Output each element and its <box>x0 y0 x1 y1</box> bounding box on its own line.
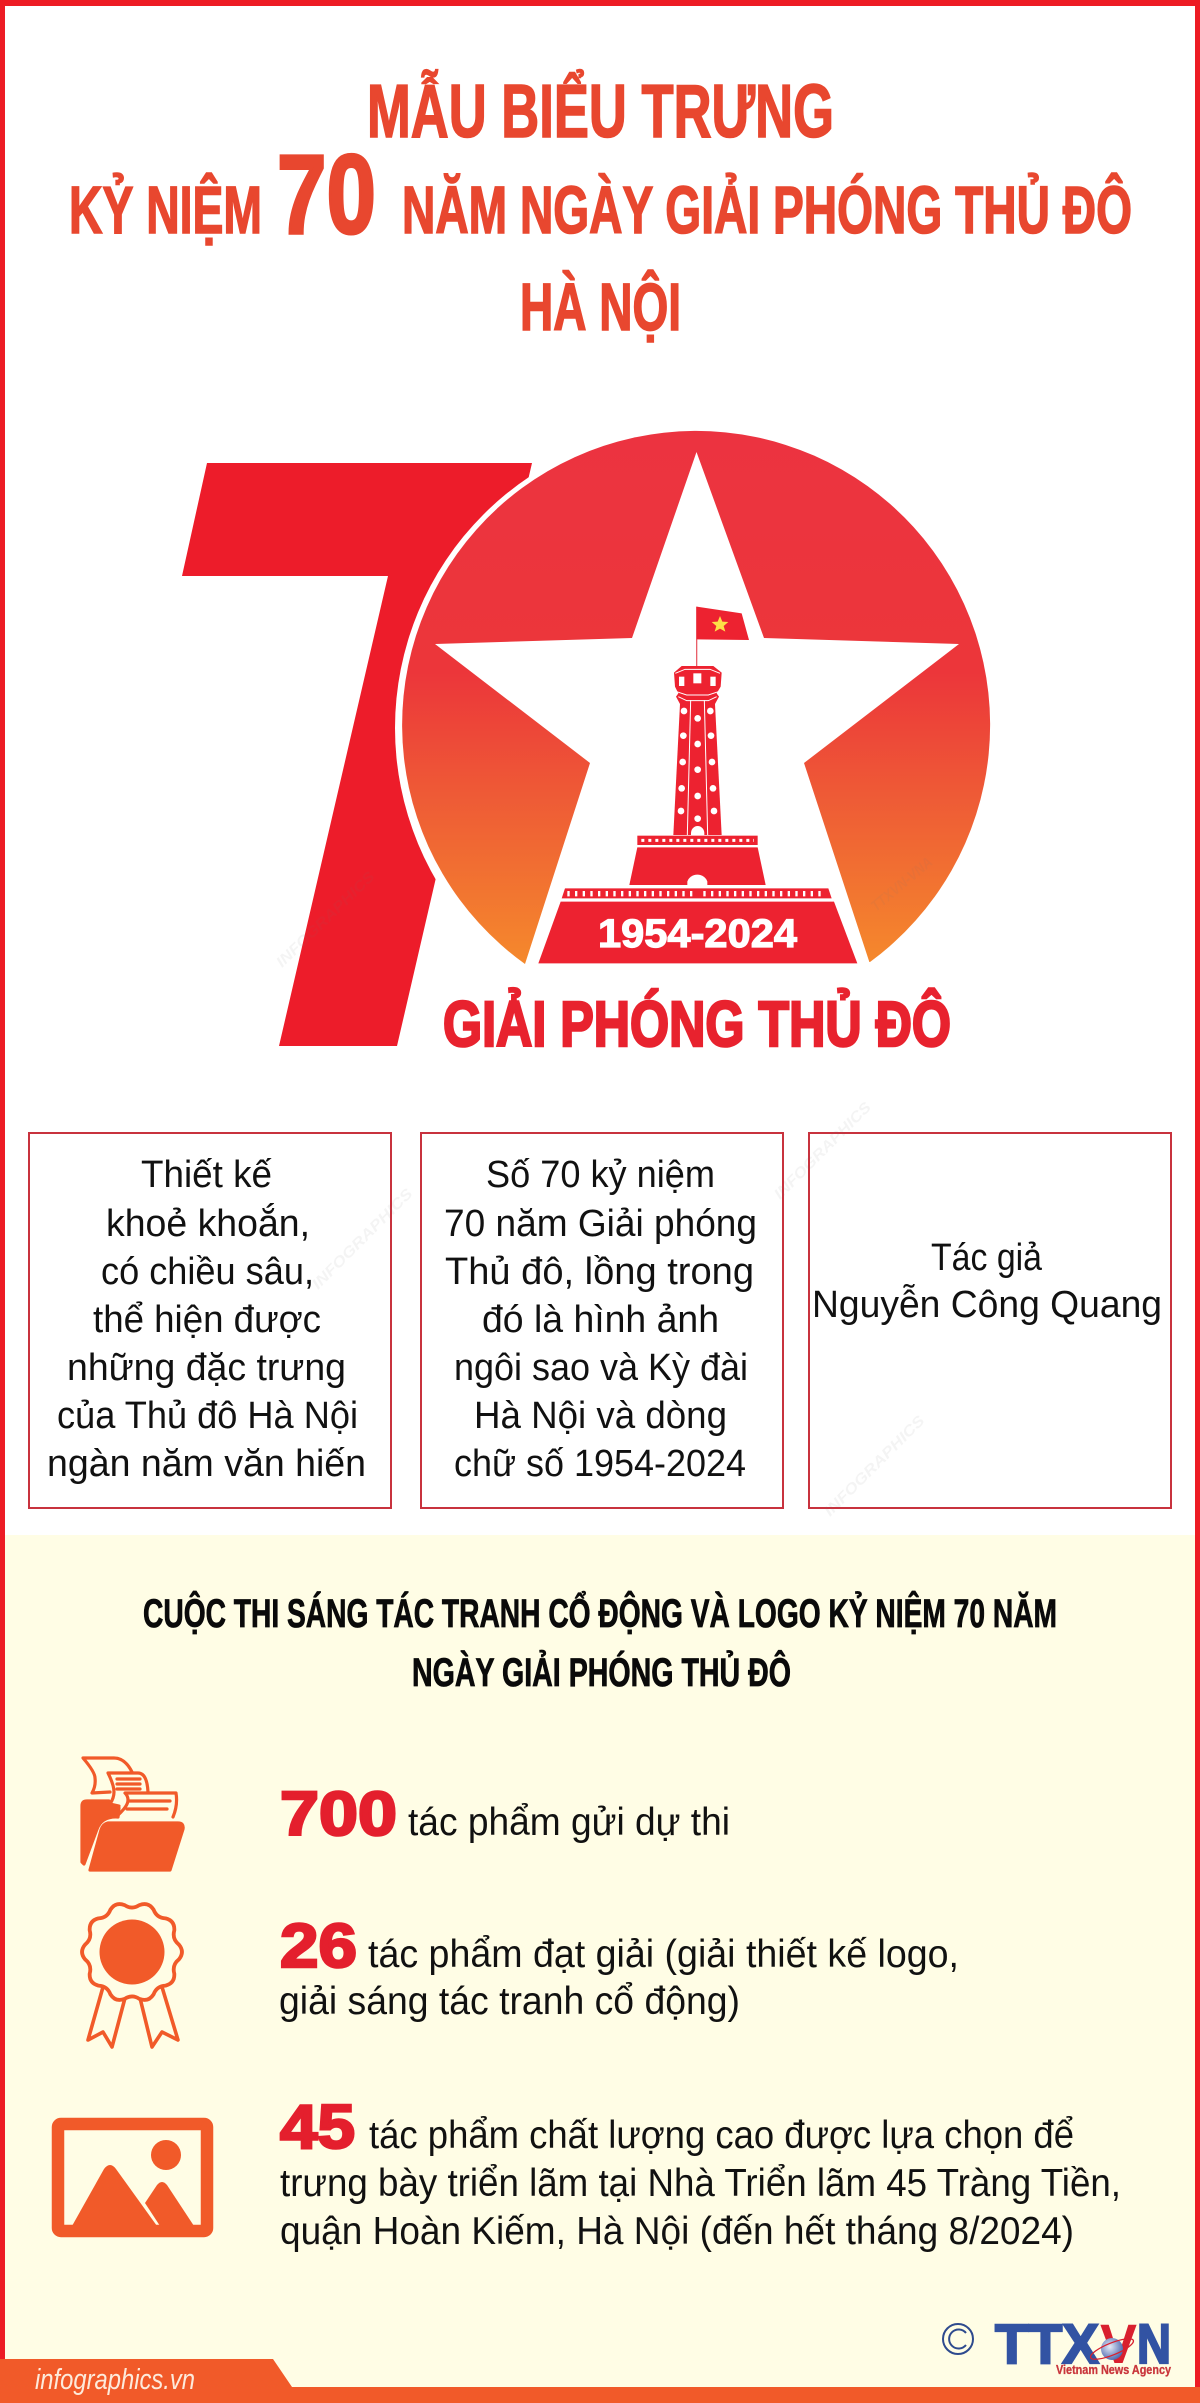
panel: design description: thể hiện được <box>93 1299 321 1341</box>
faint agency watermarks: INFOGRAPHICS <box>309 1185 416 1293</box>
panel: meaning of the number 70: Hà Nội và dòng <box>474 1395 727 1437</box>
gradient circle <box>402 431 990 964</box>
panel: author: Nguyễn Công Quang <box>812 1283 1162 1326</box>
panel: meaning of the number 70: Số 70 kỷ niệm <box>486 1154 715 1196</box>
title: 70 <box>277 132 376 257</box>
logo: TTXVN: V <box>1100 2312 1137 2375</box>
faint agency watermarks <box>273 854 936 1520</box>
panel: meaning of the number 70: 70 năm Giải phóng <box>444 1203 757 1245</box>
cream background panel <box>5 1535 1195 2387</box>
stat: 26 awarded works: tác phẩm đạt giải (giải thiết kế logo, <box>368 1933 959 1976</box>
panel: meaning of the number 70: ngôi sao và Kỳ đài <box>454 1347 748 1389</box>
panel: design description: của Thủ đô Hà Nội <box>57 1395 358 1437</box>
icon: award rosette <box>82 1904 182 2047</box>
panel: meaning of the number 70: chữ số 1954-2024 <box>454 1443 746 1485</box>
panel: meaning of the number 70: đó là hình ảnh <box>482 1299 719 1341</box>
stat: 700 works: tác phẩm gửi dự thi <box>408 1801 730 1844</box>
stat: 45 exhibited works: tác phẩm chất lượng cao được lựa chọn để <box>369 2114 1074 2157</box>
logo wordmark: GIẢI PHÓNG THỦ ĐÔ <box>443 987 951 1060</box>
panel: author <box>809 1133 1171 1508</box>
stat: 700 works <box>280 1780 730 1849</box>
stat: 45 exhibited works: trưng bày triển lãm tại Nhà Triển lãm 45 Tràng Tiền, <box>280 2162 1121 2205</box>
title: HÀ NỘI <box>520 270 681 345</box>
panel: design description: ngàn năm văn hiến <box>47 1443 366 1485</box>
panel: design description: có chiều sâu, <box>101 1251 314 1293</box>
icon: flag tower <box>538 607 857 963</box>
panel: design description: khoẻ khoắn, <box>106 1202 310 1245</box>
years label: 1954-2024 <box>598 912 798 956</box>
title: KỶ NIỆM <box>69 173 262 248</box>
title <box>69 69 1132 345</box>
stat: 26 awarded works <box>279 1912 959 2023</box>
icon: copyright <box>943 2324 973 2354</box>
panel: design description <box>29 1133 391 1508</box>
faint agency watermarks: INFOGRAPHICS <box>821 1412 928 1520</box>
heading: contest: NGÀY GIẢI PHÓNG THỦ ĐÔ <box>412 1649 791 1695</box>
logo: TTXVN: TTX <box>995 2312 1099 2375</box>
logo: 70 emblem <box>182 426 999 1060</box>
panel: meaning of the number 70 <box>421 1133 783 1508</box>
title: MẪU BIỂU TRƯNG <box>367 69 834 153</box>
heading: contest <box>143 1589 1057 1695</box>
logo: TTXVN: Vietnam News Agency <box>1056 2362 1172 2377</box>
numeral 7 <box>182 463 532 1046</box>
icon: folder with documents <box>82 1758 183 1870</box>
stat: 45 exhibited works: 45 <box>280 2093 355 2162</box>
stat: 26 awarded works: 26 <box>280 1912 357 1981</box>
panel: meaning of the number 70: Thủ đô, lồng trong <box>445 1251 754 1293</box>
panel: design description: những đặc trưng <box>67 1347 346 1389</box>
panel: author: Tác giả <box>931 1237 1043 1279</box>
stat: 45 exhibited works <box>280 2093 1121 2253</box>
logo: TTXVN <box>995 2312 1172 2377</box>
panel: design description: Thiết kế <box>141 1154 272 1196</box>
white star <box>435 452 959 964</box>
faint agency watermarks: TTXVN-VNA <box>868 854 936 915</box>
footer site label: infographics.vn <box>35 2364 195 2396</box>
logo: TTXVN: N <box>1137 2312 1171 2375</box>
faint agency watermarks: INFOGRAPHICS <box>273 868 378 971</box>
icon: picture frame <box>58 2124 207 2231</box>
white ring separating 7 and circle <box>395 426 999 1030</box>
stat: 45 exhibited works: quận Hoàn Kiếm, Hà Nội (đến hết tháng 8/2024) <box>280 2210 1074 2253</box>
stat: 26 awarded works: giải sáng tác tranh cổ động) <box>279 1980 740 2023</box>
stat: 700 works: 700 <box>280 1780 397 1849</box>
footer bar <box>0 2359 1200 2403</box>
faint agency watermarks: INFOGRAPHICS <box>771 1099 875 1203</box>
